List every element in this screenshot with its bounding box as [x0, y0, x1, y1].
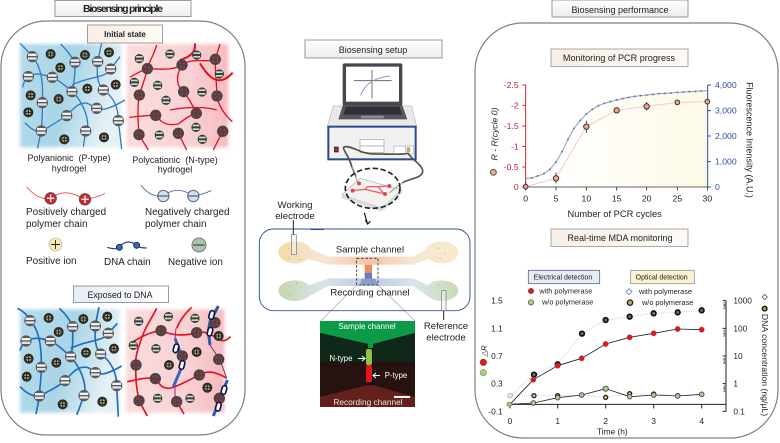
chart: mda monitoring: △R — [479, 345, 488, 358]
legend box: optical detection: Optical detection — [636, 275, 688, 282]
legend entries: w/o polymerase — [641, 298, 693, 307]
chart: pcr monitoring: -2 — [511, 100, 519, 110]
chart: mda monitoring: 100 — [733, 323, 748, 333]
legend: positively charged chain — [26, 187, 106, 230]
chart: pcr monitoring: 2,000 — [715, 131, 737, 141]
label: polycationic hydrogel: hydrogel — [158, 164, 192, 174]
chart: mda monitoring: 1.1 — [491, 323, 503, 333]
chart: pcr monitoring: 5 — [554, 193, 559, 203]
illustration: instrument and laptop — [327, 63, 423, 224]
legend box: optical detection — [631, 270, 694, 284]
legend: negative ion: Negative ion — [168, 257, 223, 268]
legend: negatively charged chain — [141, 185, 230, 230]
label: polyanionic hydrogel — [27, 153, 111, 174]
legend: positive ion: Positive ion — [26, 256, 76, 267]
legend: positive ion — [26, 238, 76, 267]
chart: pcr monitoring: 4,000 — [715, 80, 737, 90]
heading: exposed to dna — [74, 286, 168, 302]
label: reference electrode — [424, 321, 468, 344]
chart: mda monitoring: 1 — [555, 416, 560, 426]
chart: pcr monitoring: 10 — [582, 193, 591, 203]
chart: pcr monitoring: 15 — [612, 193, 622, 203]
label: polyanionic hydrogel: hydrogel — [52, 164, 86, 174]
chart: mda monitoring — [479, 270, 770, 436]
label: working electrode: Working — [277, 200, 313, 211]
heading: initial state: Initial state — [104, 30, 146, 39]
label: polycationic hydrogel: Polycationic (N-type) — [132, 155, 218, 165]
heading: real-time mda monitoring: Real-time MDA monitoring — [567, 233, 673, 243]
chart: pcr monitoring: -1.5 — [504, 121, 519, 131]
heading: monitoring of pcr progress: Monitoring of PCR progress — [563, 53, 676, 63]
heading: biosensing performance: Biosensing performance — [571, 5, 669, 15]
label: polycationic hydrogel — [132, 155, 218, 174]
chart: mda monitoring: 0.3 — [491, 379, 503, 389]
chart: mda monitoring: 1.5 — [491, 296, 503, 306]
chart: pcr monitoring: R - R(cycle 0) — [489, 107, 499, 160]
chart: mda monitoring: 10 — [733, 351, 743, 361]
heading: biosensing performance — [552, 0, 688, 17]
hydrogel diagram: exposed to dna — [17, 306, 231, 417]
legend: negative ion — [168, 238, 223, 268]
legend: negatively charged chain: Negatively charged — [145, 207, 230, 218]
chart: mda monitoring: 1 — [733, 379, 738, 389]
heading: monitoring of pcr progress — [551, 49, 688, 66]
chart: pcr monitoring: 25 — [673, 193, 682, 203]
label: reference electrode: electrode — [426, 332, 466, 344]
legend entries: w/o polymerase — [541, 298, 593, 307]
chart: pcr monitoring: -0.5 — [504, 162, 519, 172]
chart: mda monitoring: -0.1 — [488, 406, 503, 416]
chart: mda monitoring: 3 — [651, 416, 656, 426]
heading: biosensing principle — [55, 0, 191, 16]
label: recording channel: Recording channel — [330, 288, 410, 298]
chart: pcr monitoring: 0 — [523, 193, 528, 203]
micrograph: P-type — [385, 371, 407, 380]
heading: biosensing principle: Biosensing principle — [83, 3, 163, 15]
chart: pcr monitoring: Fluorescence Intensity (A.U.) — [744, 82, 754, 198]
chart: pcr monitoring: 0 — [715, 182, 720, 192]
panel: biosensing principle — [1, 0, 245, 435]
legend: negatively charged chain: polymer chain — [145, 219, 206, 230]
chart: pcr monitoring — [489, 80, 754, 219]
label: reference electrode: Reference — [424, 321, 468, 332]
legend: positively charged chain: Positively charged — [26, 207, 106, 218]
chart: pcr monitoring: 20 — [642, 193, 652, 203]
heading: biosensing setup: Biosensing setup — [339, 45, 407, 55]
heading: initial state — [88, 25, 162, 43]
chip diagram — [259, 220, 470, 321]
chart: pcr monitoring: Number of PCR cycles — [567, 209, 662, 219]
heading: biosensing setup — [305, 40, 442, 58]
chart: mda monitoring: 1000 — [733, 296, 752, 306]
label: polyanionic hydrogel: Polyanionic (P-type) — [27, 153, 111, 163]
legend — [26, 185, 230, 268]
label: working electrode: electrode — [275, 211, 315, 222]
legend entries: with polymerase — [638, 287, 692, 296]
micrograph: N-type — [330, 354, 352, 363]
chart: mda monitoring: DNA concentration (ng/μL) — [760, 314, 770, 416]
legend entries: with polymerase — [538, 286, 592, 295]
legend box: electrical detection — [528, 270, 600, 284]
legend: positively charged chain: polymer chain — [26, 219, 87, 230]
legend entries — [528, 286, 693, 307]
chart: pcr monitoring: 3,000 — [715, 106, 737, 116]
chart: pcr monitoring: -1 — [511, 141, 519, 151]
micrograph: Sample channel — [338, 322, 396, 331]
label: working electrode — [275, 200, 315, 222]
chart: mda monitoring: 2 — [603, 416, 608, 426]
panel: biosensing setup — [259, 40, 470, 407]
chart: mda monitoring: Time (h) — [597, 426, 628, 436]
chart: mda monitoring: 4 — [699, 416, 704, 426]
chart: pcr monitoring: 1,000 — [715, 157, 737, 167]
legend: dna chain: DNA chain — [104, 257, 151, 268]
panel: biosensing performance — [475, 0, 778, 438]
heading: exposed to dna: Exposed to DNA — [87, 290, 153, 300]
legend: dna chain — [104, 242, 151, 268]
hydrogel diagram: initial state — [20, 43, 233, 150]
chart: pcr monitoring: 30 — [703, 193, 712, 203]
heading: real-time mda monitoring — [551, 229, 688, 246]
micrograph — [320, 321, 415, 407]
legend box: electrical detection: Electrical detection — [534, 275, 592, 282]
chart: mda monitoring: 0 — [508, 416, 513, 426]
micrograph: Recording channel — [333, 397, 403, 407]
chart: pcr monitoring: 0 — [514, 182, 519, 192]
chart: mda monitoring: 0.1 — [733, 406, 745, 416]
label: sample channel: Sample channel — [336, 244, 404, 256]
chart: mda monitoring: 0.7 — [491, 351, 503, 361]
chart: pcr monitoring: -2.5 — [504, 80, 519, 90]
